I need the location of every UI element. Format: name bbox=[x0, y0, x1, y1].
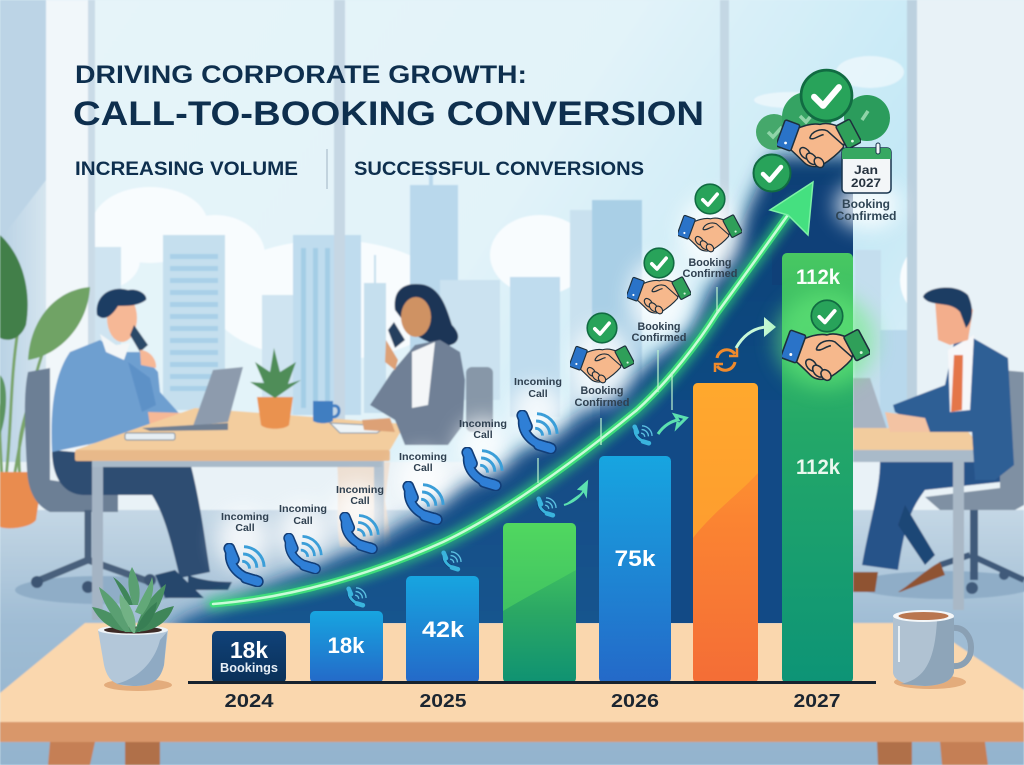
incoming call: 6: Call bbox=[528, 388, 548, 400]
booking confirmed: 1: Confirmed bbox=[574, 397, 630, 409]
incoming call: 2 bbox=[279, 503, 327, 569]
bar chart bbox=[188, 253, 876, 711]
calendar: Jan bbox=[854, 163, 878, 177]
left tall plant bbox=[0, 235, 90, 528]
booking confirmed: 2: Confirmed bbox=[632, 332, 686, 344]
incoming call: 1: Incoming bbox=[221, 511, 269, 523]
bar 75k: 75k bbox=[614, 546, 656, 571]
bar 112k: 112k bbox=[796, 456, 840, 479]
clouds bbox=[60, 56, 1020, 360]
woman legs below table bbox=[337, 462, 392, 547]
small phone icon: 1 bbox=[349, 588, 366, 605]
incoming call: 6 bbox=[514, 376, 562, 448]
small arrow: to orange bar bbox=[658, 415, 686, 434]
growth arrow bbox=[213, 182, 813, 604]
incoming call: 5: Incoming bbox=[459, 418, 507, 430]
curved arrow to 112k bar bbox=[736, 317, 776, 348]
bar 2024 bbox=[212, 631, 286, 683]
bar 112k bbox=[782, 253, 853, 683]
year axis labels bbox=[224, 690, 840, 711]
celebration cluster with calendar: Confirmed bbox=[836, 211, 896, 223]
title line two: CALL-TO-BOOKING CONVERSION bbox=[73, 95, 704, 133]
bar 2024: Bookings bbox=[220, 660, 278, 675]
white halos behind icons bbox=[217, 181, 900, 570]
incoming call: 1 bbox=[221, 511, 269, 582]
floor bbox=[0, 462, 1024, 512]
title block bbox=[73, 61, 704, 180]
bar 75k bbox=[599, 456, 671, 683]
celebration cluster with calendar: Booking bbox=[842, 199, 890, 211]
incoming call: 4: Incoming bbox=[399, 451, 447, 463]
calendar: 2027 bbox=[851, 176, 881, 190]
incoming call: 1: Call bbox=[235, 522, 255, 534]
small arrow: to 75k bar bbox=[564, 482, 587, 505]
small phone icon: 3 bbox=[539, 498, 556, 515]
window frames bbox=[0, 0, 1024, 520]
bar 112k: 112k bbox=[796, 266, 840, 289]
subheading left: INCREASING VOLUME bbox=[75, 159, 298, 180]
woman on phone bbox=[362, 284, 493, 445]
left worker on phone bbox=[25, 289, 232, 598]
right worker on laptop bbox=[853, 287, 1024, 610]
bar 42k bbox=[406, 576, 479, 683]
celebration cluster with calendar bbox=[754, 70, 896, 223]
small phone icon: 2 bbox=[444, 552, 461, 569]
bar 42k: 42k bbox=[422, 617, 465, 642]
city skyline bbox=[93, 165, 910, 450]
incoming call: 5: Call bbox=[473, 429, 493, 441]
bar 18k: 18k bbox=[328, 633, 365, 658]
booking on 112k bar bbox=[775, 292, 875, 388]
incoming call: 4 bbox=[399, 451, 447, 520]
booking confirmed: 3 bbox=[677, 184, 743, 280]
bar orange bbox=[693, 383, 758, 683]
incoming call: 3: Call bbox=[350, 495, 370, 507]
year axis labels: 2026 bbox=[611, 690, 659, 711]
succulent in pot bbox=[92, 567, 174, 691]
booking confirmed: 2: Booking bbox=[638, 321, 680, 333]
title line one: DRIVING CORPORATE GROWTH: bbox=[75, 61, 527, 89]
incoming call: 4: Call bbox=[413, 462, 433, 474]
booking confirmed: 1 bbox=[569, 313, 635, 409]
incoming call: 3: Incoming bbox=[336, 484, 384, 496]
booking confirmed: 1: Booking bbox=[580, 385, 624, 397]
calendar bbox=[842, 143, 891, 193]
coffee mug bbox=[893, 610, 971, 689]
booking confirmed: 3: Booking bbox=[688, 257, 732, 269]
incoming call: 3 bbox=[336, 484, 384, 549]
chart backdrop bbox=[160, 155, 860, 640]
booking confirmed: 3: Confirmed bbox=[682, 268, 738, 280]
year axis labels: 2027 bbox=[794, 690, 840, 711]
foreground desk bbox=[0, 623, 1024, 765]
year axis labels: 2024 bbox=[224, 690, 274, 711]
bar green 2026 bbox=[503, 523, 576, 683]
icon: refresh bbox=[715, 348, 737, 372]
small phone icon: 4 bbox=[635, 426, 652, 443]
incoming call: 2: Call bbox=[293, 515, 313, 527]
incoming call: 2: Incoming bbox=[279, 503, 327, 515]
year axis labels: 2025 bbox=[420, 690, 466, 711]
incoming call: 5 bbox=[459, 418, 507, 486]
booking confirmed: 2 bbox=[626, 248, 692, 344]
incoming call: 6: Incoming bbox=[514, 376, 562, 388]
subheading right: SUCCESSFUL CONVERSIONS bbox=[354, 159, 644, 180]
bar 18k bbox=[310, 611, 383, 683]
table with laptop, plant and mug bbox=[75, 348, 405, 620]
bar 2024: 18k bbox=[230, 637, 268, 663]
